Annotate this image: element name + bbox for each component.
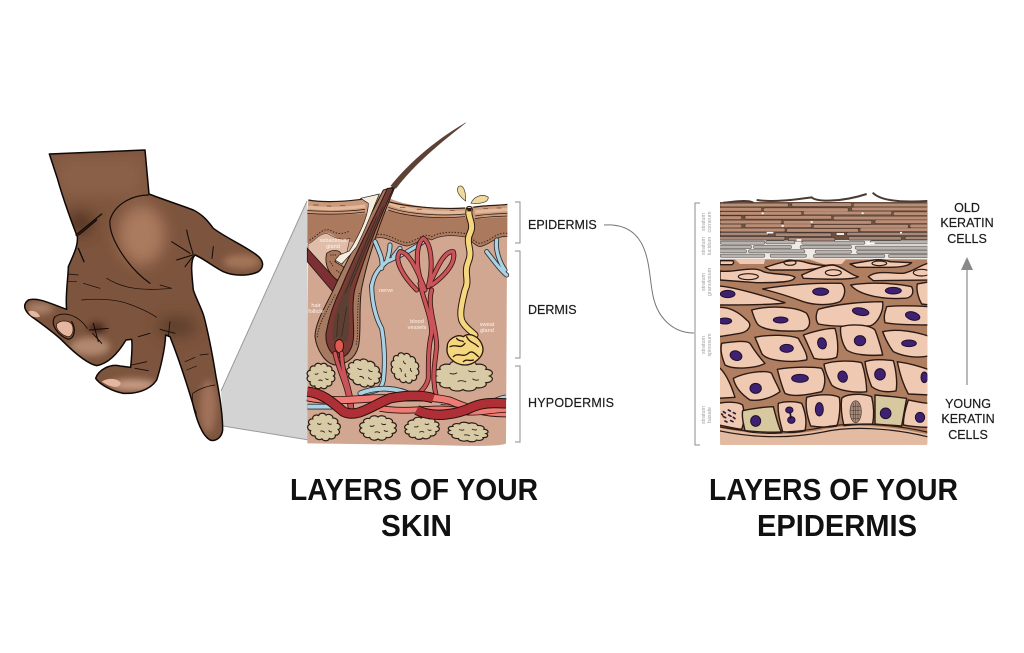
hand creases and thumb contour [53, 195, 215, 413]
structure labels inside the skin section: blood [410, 319, 424, 325]
gland pocket [308, 234, 350, 280]
white flecks between keratin [762, 213, 902, 243]
label: old keratin cells: OLD [954, 201, 980, 215]
dermis base [307, 195, 507, 446]
grey zoom wedge from fingertip to skin section [221, 201, 309, 440]
stratum granulosum [720, 259, 930, 283]
title: layers of your skin: SKIN [381, 508, 452, 543]
label: dermis: DERMIS [528, 303, 577, 317]
structure labels inside the skin section [308, 238, 495, 334]
top keratin scales [723, 193, 927, 203]
sublayer labels: spinosum [707, 333, 713, 357]
main vessels braid [307, 392, 506, 415]
title: layers of your skin: LAYERS OF YOUR [290, 472, 538, 507]
label: young keratin cells: CELLS [948, 428, 988, 442]
title: layers of your epidermis: LAYERS OF YOUR [709, 472, 958, 507]
sublayer labels: granulosum [707, 267, 713, 296]
muscle [307, 248, 345, 298]
illustration: hand pointing down [24, 149, 264, 442]
fingernails [28, 311, 121, 387]
epidermis sublayer bracket [695, 203, 700, 445]
label: epidermis: EPIDERMIS [528, 218, 597, 232]
sublayer labels: stratum [701, 406, 707, 424]
sublayer labels: stratum [701, 213, 707, 231]
structure labels inside the skin section: follicle [308, 309, 324, 315]
blood vessels [335, 238, 454, 410]
sublayer labels: lucidum [707, 236, 713, 255]
illustration: epidermis cell layers [718, 193, 930, 447]
label: young keratin cells: YOUNG [945, 397, 991, 411]
sublayer labels: stratum [701, 273, 707, 291]
illustration: skin cross-section [306, 123, 507, 446]
fat clusters [306, 348, 492, 443]
sublayer labels: basale [707, 407, 713, 423]
nuclei [718, 287, 928, 426]
sebaceous gland [326, 250, 347, 281]
connector from epidermis label to epidermis detail [604, 225, 694, 333]
oil duct [335, 194, 379, 264]
hypodermis nerve [307, 389, 506, 415]
structure labels inside the skin section: gland [480, 328, 494, 334]
stratum spinosum cells [718, 282, 930, 400]
title: layers of your skin [290, 472, 538, 543]
structure labels inside the skin section: gland [326, 244, 340, 250]
skin layer brackets [515, 202, 520, 442]
structure labels inside the skin section: vessels [408, 325, 427, 331]
hair follicle [315, 187, 395, 365]
label: old keratin cells: KERATIN [940, 216, 994, 230]
label: old keratin cells [940, 201, 994, 246]
title: layers of your epidermis: EPIDERMIS [757, 508, 917, 543]
nerve [360, 240, 507, 393]
epidermis bands [307, 197, 507, 219]
arrow: young to old keratin cells [961, 257, 973, 385]
label: old keratin cells: CELLS [947, 232, 987, 246]
structure labels inside the skin section: hair [311, 303, 321, 309]
structure labels inside the skin section: sweat [480, 322, 495, 328]
structure labels inside the skin section: nerve [379, 288, 393, 294]
basement membrane [718, 426, 930, 447]
label: young keratin cells: KERATIN [941, 412, 995, 426]
label: hypodermis: HYPODERMIS [528, 396, 614, 410]
sublayer labels: corneum [707, 211, 713, 232]
sweat gland and duct [447, 209, 483, 365]
stratum basale cells [718, 394, 930, 433]
sublayer labels [701, 211, 713, 424]
structure labels inside the skin section: sebaceous [319, 238, 347, 244]
upper dermis with dotted edge [307, 210, 507, 247]
sweat drops [457, 186, 488, 203]
stratum corneum [721, 205, 927, 256]
title: layers of your epidermis [709, 472, 958, 543]
hair shaft [391, 123, 466, 188]
sublayer labels: stratum [701, 336, 707, 354]
label: young keratin cells [941, 397, 995, 442]
sublayer labels: stratum [701, 237, 707, 255]
